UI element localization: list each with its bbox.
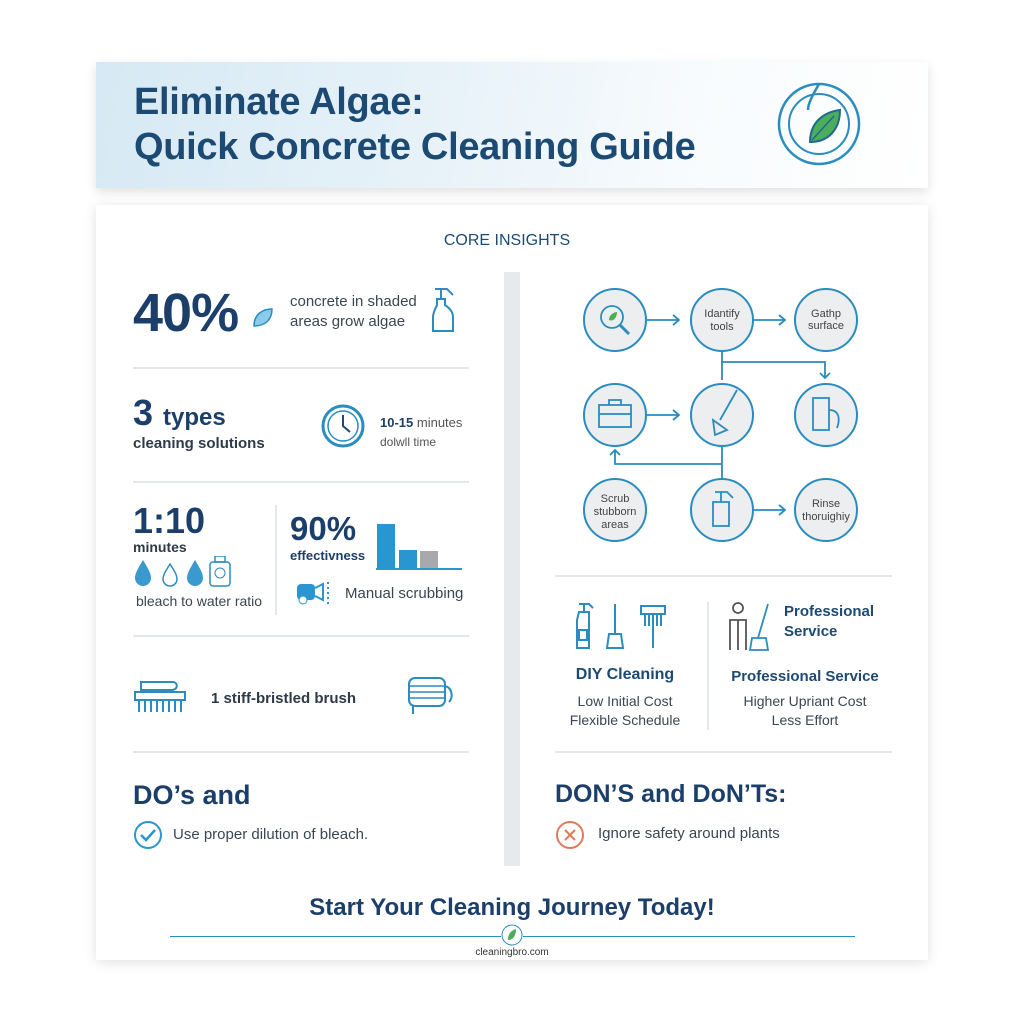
stat: 1:10 ratio: minutes	[133, 539, 187, 555]
stat: 3 types: 10-15 minutes	[380, 415, 462, 430]
comparison: professional: Professional Service	[731, 668, 879, 685]
title: Quick Concrete Cleaning Guide	[134, 126, 695, 168]
stat: brush: 1 stiff-bristled brush	[211, 690, 356, 707]
stat: 90% effectiveness with bar chart: effectivness	[290, 548, 365, 563]
comparison: DIY: Low Initial Cost	[578, 693, 672, 709]
comparison: professional: Professional	[784, 603, 874, 620]
comparison: professional: Higher Upriant Cost	[744, 693, 866, 709]
main card	[96, 205, 928, 960]
flowchart: Idantify	[704, 308, 740, 320]
flowchart: tools	[710, 321, 734, 333]
comparison: professional	[729, 602, 879, 728]
flowchart: thoruighiy	[802, 511, 850, 523]
dont item	[556, 821, 780, 849]
stat: 40%	[133, 283, 454, 343]
comparison: professional: Less Effort	[772, 712, 838, 728]
flowchart: Scrub	[601, 493, 629, 505]
heading: core insights: CORE INSIGHTS	[444, 232, 570, 249]
divider small	[275, 505, 277, 615]
stat: 1:10 ratio: bleach to water ratio	[136, 593, 262, 609]
comparison: DIY: DIY Cleaning	[576, 666, 674, 683]
title: Eliminate Algae:	[134, 81, 423, 123]
flowchart: surface	[808, 320, 844, 332]
flowchart: stubborn	[594, 506, 636, 518]
stat: 3 types: 3 types	[133, 392, 226, 433]
stat: 40%: 40%	[133, 283, 238, 343]
title	[134, 81, 695, 168]
stat: 90% effectiveness with bar chart: 90%	[290, 510, 356, 547]
header banner	[96, 62, 928, 188]
stat: 40%: concrete in shaded	[290, 293, 417, 310]
flowchart: Gathp	[811, 308, 841, 320]
comparison: DIY	[570, 603, 680, 728]
footer logo	[475, 924, 549, 958]
heading: DON'Ts: DON’S and DoN’Ts:	[555, 780, 786, 808]
vertical divider	[504, 272, 520, 866]
footer logo: cleaningbro.com	[475, 947, 549, 958]
stat: 1:10 ratio	[133, 500, 262, 609]
dont item: Ignore safety around plants	[598, 825, 780, 842]
do item: Use proper dilution of bleach.	[173, 826, 368, 843]
stat: 3 types: cleaning solutions	[133, 435, 265, 452]
comparison: DIY: Flexible Schedule	[570, 712, 680, 728]
icon: leaf drop logo	[778, 82, 860, 166]
stat: 3 types	[133, 392, 462, 452]
stat: 3 types: dolwll time	[380, 435, 436, 449]
stat: 90% effectiveness with bar chart	[290, 510, 463, 604]
flowchart: areas	[601, 519, 629, 531]
flowchart: Rinse	[812, 498, 840, 510]
footer call to action: Start Your Cleaning Journey Today!	[309, 894, 715, 921]
comparison: professional: Service	[784, 623, 837, 640]
stat: 90% effectiveness with bar chart: Manual scrubbing	[345, 585, 463, 602]
do item	[134, 821, 368, 849]
stat: 40%: areas grow algae	[290, 313, 405, 330]
stat: 1:10 ratio: 1:10	[133, 500, 205, 541]
stat: brush	[134, 677, 453, 714]
heading: DOs: DO’s and	[133, 780, 251, 810]
flowchart	[583, 288, 858, 542]
